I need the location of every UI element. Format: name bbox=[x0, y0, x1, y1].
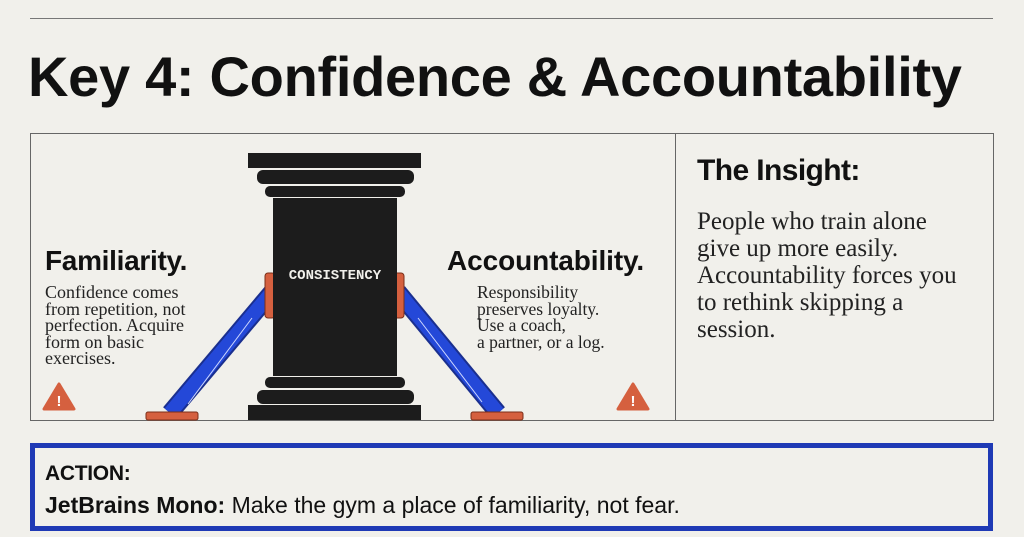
text: accountability: Use a coach, bbox=[477, 315, 566, 335]
text: accountability: Responsibility bbox=[477, 282, 578, 302]
pillar: CONSISTENCY bbox=[289, 268, 382, 284]
text: insight: session. bbox=[697, 316, 775, 343]
strut right bbox=[394, 273, 523, 420]
callout: action bbox=[30, 443, 993, 531]
heading: familiarity: Familiarity. bbox=[45, 245, 187, 276]
icon: warning left: ! bbox=[56, 393, 62, 410]
panel divider insight bbox=[675, 134, 676, 420]
icon: warning right: ! bbox=[630, 393, 636, 410]
text: insight: Accountability forces you bbox=[697, 262, 957, 289]
text: familiarity: exercises. bbox=[45, 348, 115, 368]
heading: insight: The Insight: bbox=[697, 154, 860, 187]
text: insight: to rethink skipping a bbox=[697, 289, 903, 316]
heading: accountability: Accountability. bbox=[447, 245, 644, 276]
text: insight: People who train alone bbox=[697, 208, 927, 235]
action label: ACTION: bbox=[45, 462, 130, 485]
text: accountability bbox=[477, 282, 605, 352]
text: insight: give up more easily. bbox=[697, 235, 898, 262]
text: accountability: a partner, or a log. bbox=[477, 332, 605, 352]
text: familiarity: from repetition, not bbox=[45, 298, 185, 318]
text: familiarity: perfection. Acquire bbox=[45, 315, 184, 335]
text: accountability: preserves loyalty. bbox=[477, 298, 599, 318]
panel: main bbox=[30, 133, 994, 421]
action text: JetBrains Mono: Make the gym a place of familiarity, not fear. bbox=[45, 492, 680, 518]
title: Key 4: Confidence & Accountability bbox=[28, 45, 962, 108]
icon: warning left bbox=[44, 384, 74, 410]
strut left bbox=[146, 273, 275, 420]
text: familiarity bbox=[45, 282, 186, 368]
icon: warning right bbox=[618, 384, 648, 410]
text: insight bbox=[697, 208, 957, 343]
text: familiarity: form on basic bbox=[45, 332, 144, 352]
text: familiarity: Confidence comes bbox=[45, 282, 178, 302]
pillar bbox=[248, 153, 421, 420]
